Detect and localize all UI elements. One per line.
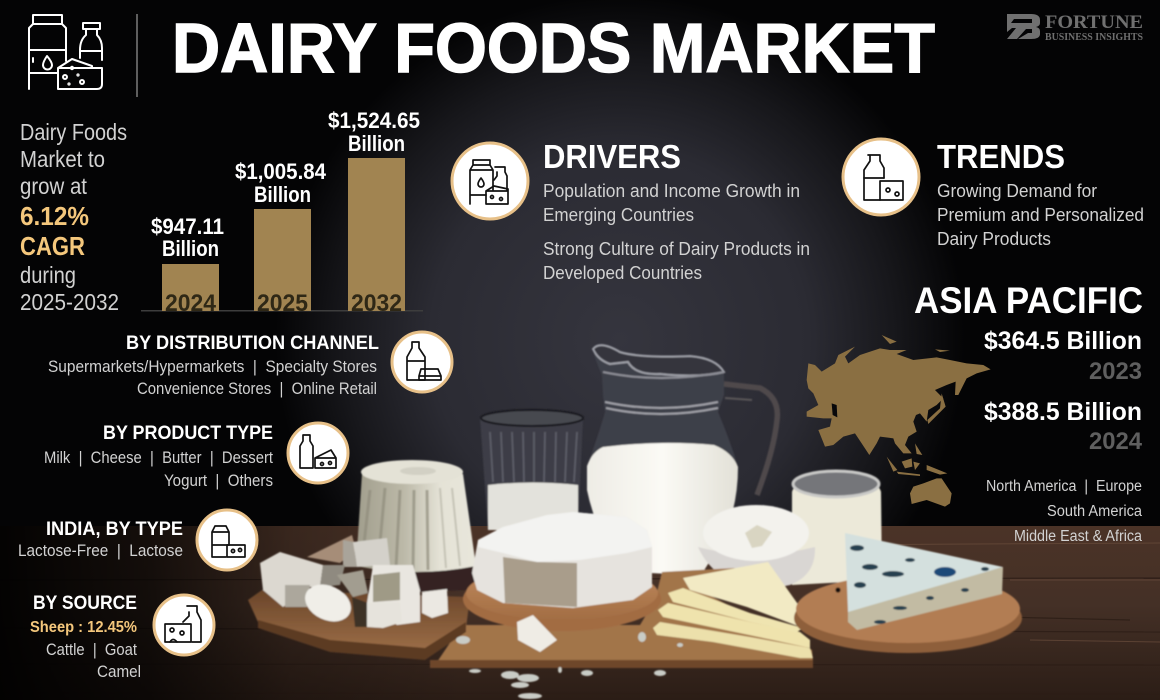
yellow cheese slices — [653, 562, 813, 658]
regional stats: Asia Pacific — [914, 280, 1143, 455]
segment: by source: Camel — [97, 662, 141, 681]
segment: by distribution channel: BY DISTRIBUTION CHANNEL — [126, 332, 379, 354]
icon: distribution channel — [392, 332, 452, 392]
segment: India by type: INDIA, BY TYPE — [46, 518, 183, 540]
trends text: Dairy Products — [937, 229, 1051, 249]
trends text: Growing Demand for — [937, 181, 1097, 201]
header divider — [136, 14, 138, 97]
bar 2024: $947.11 — [151, 214, 224, 239]
trends text: TRENDS — [937, 138, 1065, 175]
segment: by source: Cattle | Goat — [46, 640, 137, 659]
segment: India by type: Lactose-Free | Lactose — [18, 541, 183, 560]
segment: by source: BY SOURCE — [33, 592, 137, 614]
blue cheese wedge — [845, 533, 1003, 630]
trends text: Premium and Personalized — [937, 205, 1144, 225]
small glass jar of yogurt — [792, 471, 882, 585]
round plate under camembert — [463, 566, 661, 631]
glass jug of milk — [587, 345, 777, 574]
logo: Fortune Business Insights — [1007, 12, 1143, 43]
header icon: milk carton, bottle and cheese — [29, 15, 102, 89]
left serving board — [248, 535, 470, 660]
regional stats: Asia Pacific: $364.5 Billion — [984, 327, 1142, 355]
icon: India by type — [197, 510, 257, 570]
CAGR text block: CAGR — [20, 231, 85, 261]
dairy products photo illustration — [248, 345, 1022, 699]
CAGR text block: grow at — [20, 173, 88, 199]
icon: drivers — [452, 143, 528, 219]
icon: product type — [288, 423, 348, 483]
trends text — [937, 138, 1144, 249]
bar 2024 — [151, 214, 224, 317]
drivers text: Strong Culture of Dairy Products in — [543, 239, 810, 259]
segment: India by type — [18, 518, 183, 560]
drivers text: Emerging Countries — [543, 205, 694, 225]
drivers text: Population and Income Growth in — [543, 181, 800, 201]
cutting board — [430, 568, 813, 668]
segment: by source: Sheep : 12.45% — [30, 619, 137, 636]
bar 2025: $1,005.84 — [235, 159, 327, 184]
wooden table — [0, 526, 1160, 700]
ribbed fresh cheese — [356, 460, 478, 592]
logo: Fortune Business Insights: BUSINESS INSIGHTS — [1045, 32, 1143, 43]
bar 2032: 2032 — [351, 290, 402, 317]
icon: by source — [154, 595, 214, 655]
bar 2024: Billion — [162, 236, 219, 261]
drivers text — [543, 138, 810, 283]
other regions list: Middle East & Africa — [1014, 528, 1142, 545]
regional stats: Asia Pacific: $388.5 Billion — [984, 398, 1142, 426]
CAGR text block: 2025-2032 — [20, 289, 119, 315]
CAGR text block: Dairy Foods — [20, 119, 127, 145]
CAGR text block — [20, 119, 127, 315]
other regions list: South America — [1047, 503, 1142, 520]
right wooden plate — [794, 575, 1022, 653]
bar 2032: $1,524.65 — [328, 108, 420, 133]
CAGR text block: 6.12% — [20, 201, 89, 231]
bar 2025 — [235, 159, 327, 317]
segment: by product type: Milk | Cheese | Butter | Dessert — [44, 448, 273, 467]
drivers text: DRIVERS — [543, 138, 681, 175]
segment: by source — [30, 592, 141, 681]
bar 2032: Billion — [348, 131, 405, 156]
bar 2032 — [328, 108, 420, 317]
segment: by product type: BY PRODUCT TYPE — [103, 422, 273, 444]
bar chart: market size — [141, 108, 423, 317]
CAGR text block: Market to — [20, 146, 105, 172]
regional stats: Asia Pacific: ASIA PACIFIC — [914, 280, 1143, 321]
segment: by product type — [44, 422, 273, 490]
drivers text: Developed Countries — [543, 263, 702, 283]
cheese crumbs — [456, 615, 683, 699]
segment: by product type: Yogurt | Others — [164, 471, 273, 490]
logo: Fortune Business Insights: FORTUNE — [1045, 12, 1143, 33]
glass of milk — [480, 410, 583, 530]
icon: trends — [843, 139, 919, 215]
regional stats: Asia Pacific: 2023 — [1089, 358, 1142, 385]
bowl with mozzarella — [698, 505, 815, 590]
other regions list — [986, 478, 1142, 545]
white cheese cubes — [260, 538, 448, 629]
segment: by distribution channel — [48, 332, 379, 398]
CAGR text block: during — [20, 262, 76, 288]
regional stats: Asia Pacific: 2024 — [1089, 428, 1143, 455]
bar 2024: 2024 — [165, 290, 217, 317]
bar 2025: 2025 — [257, 290, 308, 317]
camembert cheese — [472, 512, 652, 608]
other regions list: North America | Europe — [986, 478, 1142, 495]
map: Asia Pacific — [807, 335, 991, 507]
title: DAIRY FOODS MARKET — [172, 9, 935, 87]
segment: by distribution channel: Convenience Stores | Online Retail — [137, 379, 377, 398]
segment: by distribution channel: Supermarkets/Hypermarkets | Specialty Stores — [48, 357, 377, 376]
bar 2025: Billion — [254, 182, 311, 207]
